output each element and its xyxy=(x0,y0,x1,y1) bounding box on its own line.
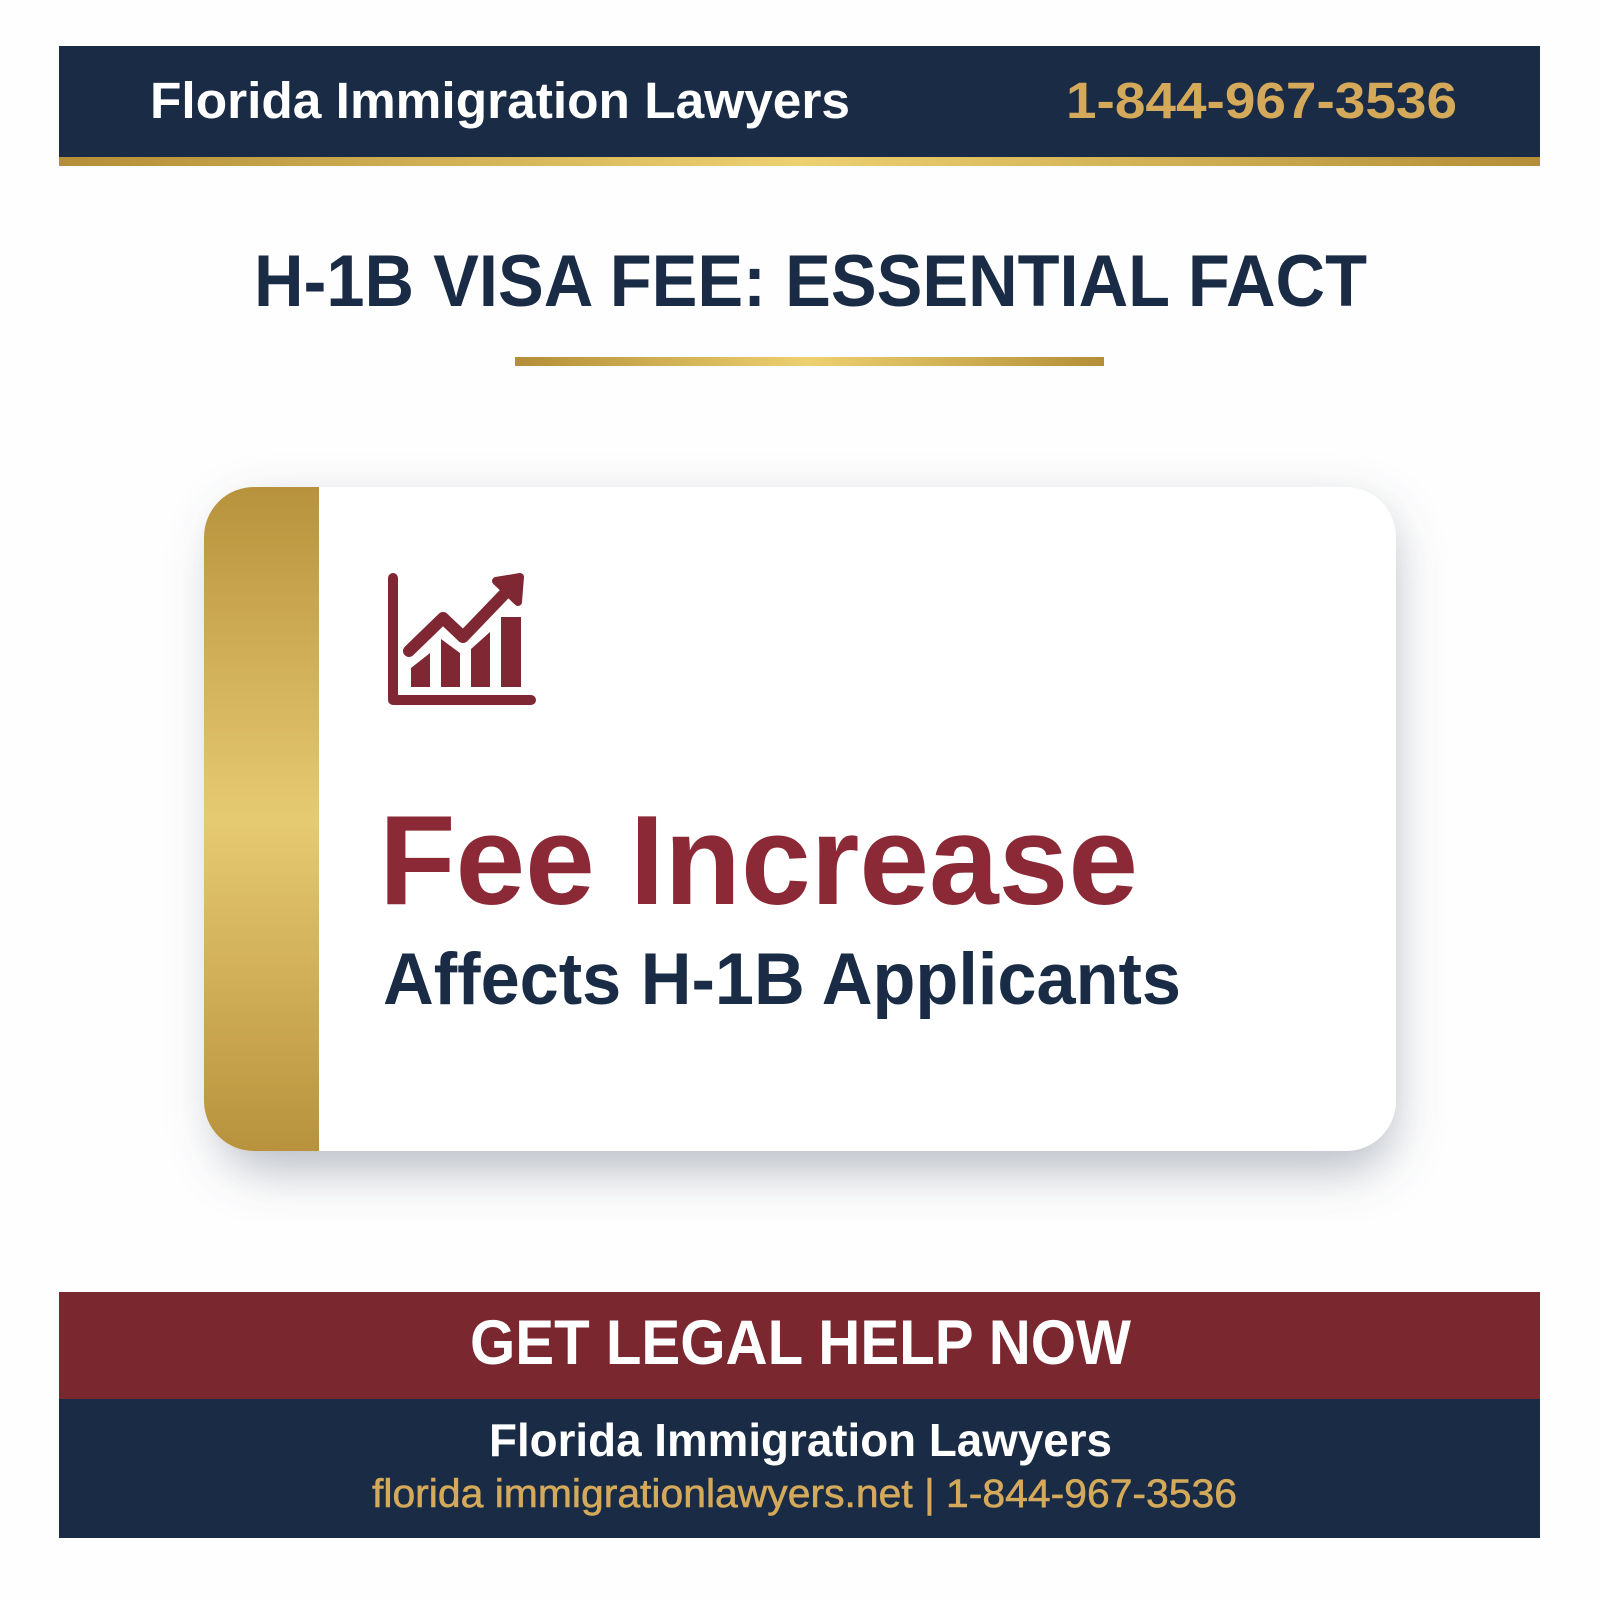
header bar xyxy=(59,46,1540,166)
header firm name: Florida Immigration Lawyers xyxy=(150,72,850,129)
title: H-1B VISA FEE: ESSENTIAL FACT xyxy=(254,241,1367,322)
card gold side strip xyxy=(204,487,319,1151)
footer contact line: florida immigrationlawyers.net | 1-844-967-3536 xyxy=(372,1472,1237,1516)
call to action band xyxy=(59,1292,1540,1399)
call to action text: GET LEGAL HELP NOW xyxy=(470,1308,1131,1378)
footer firm name: Florida Immigration Lawyers xyxy=(489,1414,1112,1466)
title underline xyxy=(515,357,1104,366)
card subheading: Affects H-1B Applicants xyxy=(383,939,1181,1020)
card shadow xyxy=(218,507,1394,1171)
card headline: Fee Increase xyxy=(379,789,1138,931)
header phone number: 1-844-967-3536 xyxy=(1066,72,1457,129)
icon: rising bar chart with arrow xyxy=(393,577,531,700)
footer band xyxy=(59,1399,1540,1538)
panel: fact card xyxy=(204,487,1396,1151)
